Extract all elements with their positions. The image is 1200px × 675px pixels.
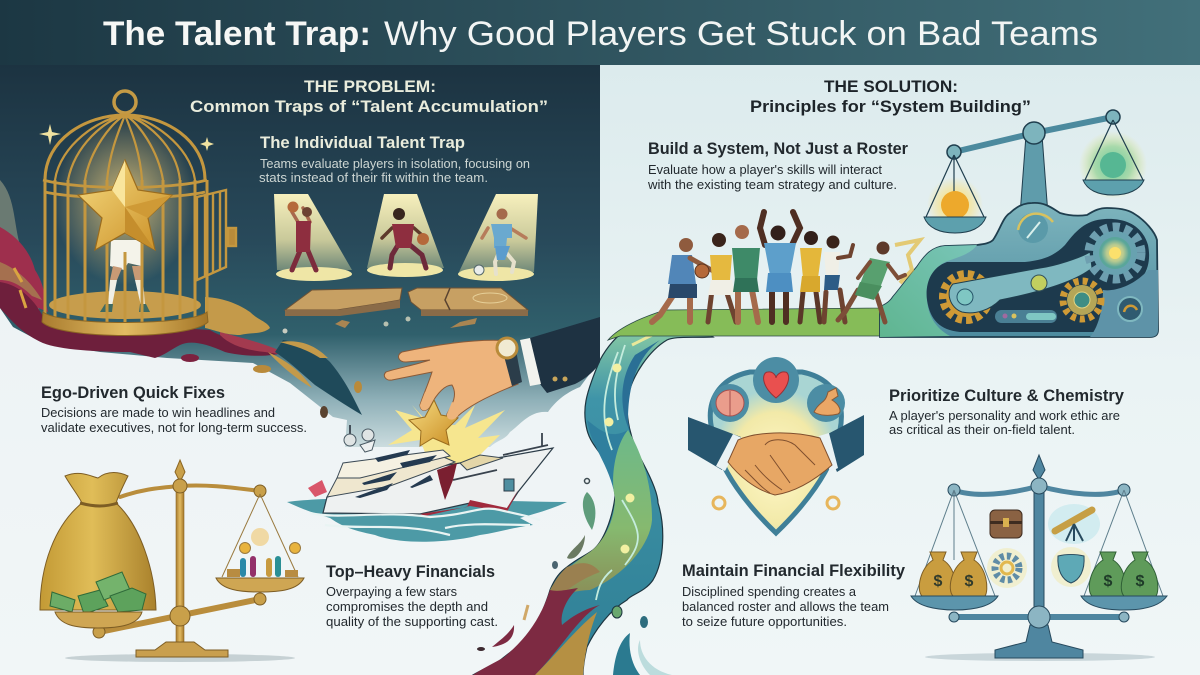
scale beams [99, 485, 260, 632]
text block: top-heavy financials: Overpaying a few stars [326, 585, 457, 599]
text block: maintain flexibility [682, 561, 906, 629]
shield [1051, 547, 1091, 587]
cage door [197, 190, 236, 280]
river stream [473, 328, 713, 675]
cuff left [716, 434, 742, 471]
text block: prioritize culture: as critical as their on-field talent. [889, 423, 1075, 437]
sparkle [200, 137, 214, 151]
spotlight 3 [458, 194, 538, 281]
icon: hand placing star [384, 317, 600, 420]
green dollar signs [1104, 573, 1145, 590]
player 2 [708, 233, 736, 322]
team players [652, 212, 905, 322]
left toxic flow [0, 180, 362, 418]
sparkle [39, 124, 61, 145]
hand [384, 340, 518, 420]
text block: ego-driven quick fixes: Decisions are made to win headlines and [41, 406, 275, 420]
pan right [1081, 596, 1167, 610]
text block: maintain flexibility: Disciplined spending creates a [682, 585, 856, 599]
text block: problem heading: Common Traps of “Talent Accumulation” [190, 97, 548, 116]
icon: sinking yacht [287, 425, 567, 542]
cage bars [43, 115, 207, 322]
right sleeve [822, 415, 864, 472]
icon: handshake shield [688, 357, 864, 533]
player 1 [652, 238, 715, 322]
smile badge [1031, 275, 1047, 291]
sleeve [530, 317, 600, 393]
orange node left [713, 497, 725, 509]
text block: problem heading: THE PROBLEM: [304, 78, 436, 96]
text block: top-heavy financials: compromises the depth and [326, 600, 488, 614]
cuff [520, 338, 541, 386]
icon: unbalanced gold scale [40, 460, 304, 662]
spotlight 1 [274, 194, 352, 281]
water [287, 498, 567, 542]
dial upper [1018, 213, 1053, 243]
fingers over star [420, 392, 462, 420]
text block: individual talent trap [259, 133, 530, 185]
text block: maintain flexibility: to seize future opportunities. [682, 615, 847, 629]
title: regular part: Why Good Players Get Stuck on Bad Teams [384, 15, 1098, 53]
green ramp [880, 245, 977, 337]
small gauge [1118, 297, 1142, 321]
maroon strand [473, 588, 600, 675]
panel: problem dark background [0, 65, 600, 447]
pan left [911, 596, 998, 610]
text block: ego-driven quick fixes: validate executives, not for long-term success. [41, 421, 307, 435]
left sleeve [688, 417, 741, 470]
cuff right [819, 433, 838, 472]
machine body [880, 203, 1158, 337]
icon: golden cage with star [42, 91, 236, 336]
gold dollar signs: $ [965, 573, 974, 590]
green leaf strand [550, 430, 652, 594]
gold gear right [1063, 281, 1101, 319]
player 6 [824, 236, 853, 322]
player 7 running [838, 242, 905, 322]
icon: cracked court [285, 288, 528, 328]
treasure chest [990, 510, 1022, 538]
orange node right [827, 497, 839, 509]
hull [323, 448, 553, 514]
text block: individual talent trap: The Individual Talent Trap [260, 133, 465, 152]
damage [437, 463, 457, 500]
cage base [42, 312, 208, 336]
blue-grey lower panel [1090, 270, 1158, 337]
text block: maintain flexibility: balanced roster and allows the team [682, 600, 889, 614]
text block: build a system [647, 139, 908, 192]
green money bags [1089, 552, 1158, 596]
icon: balanced system scale [924, 110, 1147, 233]
star burst [388, 405, 505, 465]
green dollar signs: $ [1104, 573, 1113, 590]
machine interior [927, 219, 1149, 332]
cage ring [114, 91, 136, 113]
machine arm [949, 252, 1092, 313]
flag [308, 480, 327, 497]
title: bold part: The Talent Trap: [103, 15, 371, 53]
player 3 [732, 225, 760, 322]
brain [711, 384, 749, 422]
spotlight 2 [367, 194, 444, 277]
text block: individual talent trap: Teams evaluate players in isolation, focusing on [260, 157, 530, 171]
gold strand [535, 612, 597, 675]
text block: maintain flexibility: Maintain Financial Flexibility [682, 561, 906, 580]
hull red stripe [420, 490, 518, 516]
scale post [136, 460, 228, 657]
text block: prioritize culture: Prioritize Culture & Chemistry [889, 386, 1125, 405]
blue gear [1089, 227, 1141, 279]
gold dollar signs: $ [934, 573, 943, 590]
grass path [608, 300, 897, 340]
icon: falling star [409, 400, 458, 446]
gold money bags [919, 552, 987, 596]
cage floor [49, 291, 201, 319]
post and base [995, 455, 1083, 658]
shield [710, 372, 841, 533]
gear [987, 548, 1027, 588]
text block: problem heading [190, 78, 548, 116]
telescope [1048, 504, 1100, 544]
ball [695, 264, 709, 278]
money bag [40, 472, 156, 628]
beams [954, 486, 1124, 617]
river body [473, 328, 713, 675]
text block: solution heading: Principles for “System Building” [750, 97, 1031, 116]
text block: build a system: with the existing team strategy and culture. [647, 178, 897, 192]
icon: balanced blue scale [911, 455, 1167, 661]
text block: ego-driven quick fixes [41, 383, 307, 435]
caged player legs [100, 240, 150, 312]
player 5 [800, 231, 822, 322]
spotlight players [274, 194, 538, 281]
text block: ego-driven quick fixes: Ego-Driven Quick Fixes [41, 383, 225, 402]
title band [0, 0, 1200, 65]
text block: top-heavy financials [326, 562, 498, 629]
text block: top-heavy financials: quality of the supporting cast. [326, 615, 498, 629]
text block: prioritize culture: A player's personality and work ethic are [889, 409, 1120, 423]
panel: solution light background [600, 65, 1200, 675]
shaking hands [728, 433, 832, 495]
flexed arm [807, 384, 845, 422]
icon: team machine [608, 203, 1158, 340]
gold dollar signs [934, 573, 974, 590]
text block: individual talent trap: stats instead of their fit within the team. [259, 171, 488, 185]
indicator bar [995, 310, 1057, 323]
text block: top-heavy financials: Top–Heavy Financials [326, 562, 495, 581]
heart [753, 357, 799, 403]
white waves [310, 509, 540, 535]
gold gear left [943, 274, 989, 320]
watch [497, 338, 522, 386]
cage star [78, 160, 172, 250]
green dollar signs: $ [1136, 573, 1145, 590]
player 4 arms raised [760, 212, 800, 322]
text block: build a system: Evaluate how a player's skills will interact [648, 163, 883, 177]
text block: build a system: Build a System, Not Just a Roster [648, 139, 908, 158]
text block: solution heading: THE SOLUTION: [824, 78, 958, 96]
upper deep blue strand [622, 340, 660, 432]
small pan with figures [216, 494, 304, 592]
text block: solution heading [750, 78, 1031, 116]
text block: prioritize culture [889, 386, 1125, 437]
olive strand [545, 563, 600, 605]
superstructure [327, 452, 455, 497]
